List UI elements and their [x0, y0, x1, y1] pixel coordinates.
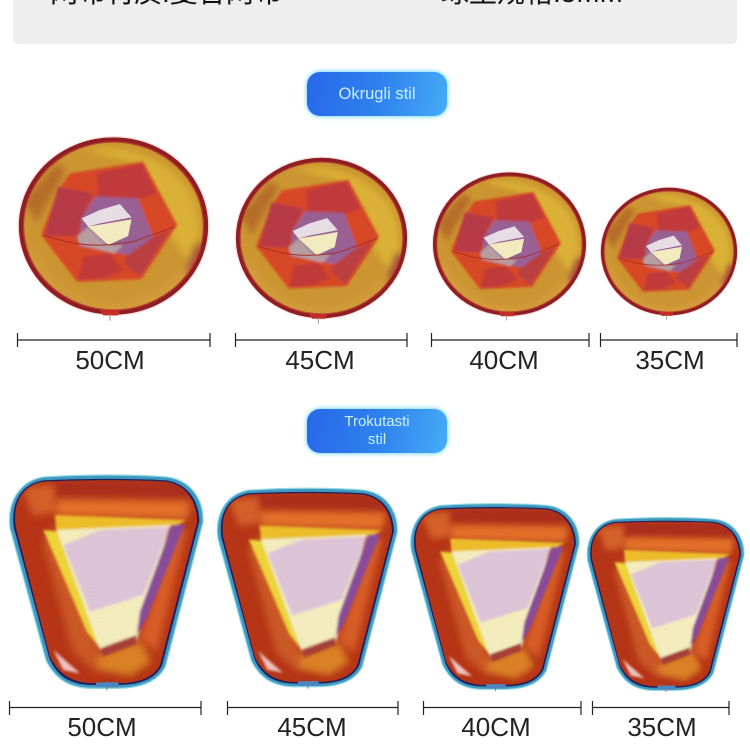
dimension 40cm round: 40CM	[469, 345, 539, 375]
dimension 35cm round: 35CM	[635, 345, 705, 375]
button: round style: Okrugli stil	[338, 84, 416, 102]
triangular net 35cm	[585, 518, 747, 692]
button: round style	[307, 72, 447, 116]
triangular net 50cm	[7, 475, 207, 690]
round net 45cm	[231, 151, 415, 326]
round net 50cm	[13, 130, 216, 323]
dimension 45cm triangular: 45CM	[277, 712, 347, 742]
dimension 35cm triangular: 35CM	[627, 712, 697, 742]
dimension 50cm round	[18, 333, 210, 375]
button: triangular style	[307, 409, 447, 453]
button: triangular style: stil	[368, 431, 386, 448]
dimension 45cm round	[236, 333, 407, 375]
dimension 45cm round: 45CM	[285, 345, 355, 375]
dimension 50cm triangular: 50CM	[67, 712, 137, 742]
triangular net 40cm	[408, 504, 582, 691]
dimension 35cm round	[600, 333, 737, 375]
dimension 45cm triangular	[228, 701, 398, 742]
dimension 40cm triangular: 40CM	[461, 712, 531, 742]
button: triangular style: Trokutasti	[344, 413, 410, 430]
product and dimension drawings	[8, 136, 744, 736]
dimension 40cm round	[432, 333, 589, 375]
dimension 35cm triangular	[592, 701, 729, 742]
dimension 40cm triangular	[424, 701, 581, 742]
dimension 50cm triangular	[10, 701, 201, 742]
spec panel	[13, 0, 737, 44]
round net 40cm	[428, 166, 593, 323]
dimension 50cm round: 50CM	[75, 345, 145, 375]
round net 35cm	[597, 182, 743, 322]
triangular net 45cm	[215, 488, 401, 689]
